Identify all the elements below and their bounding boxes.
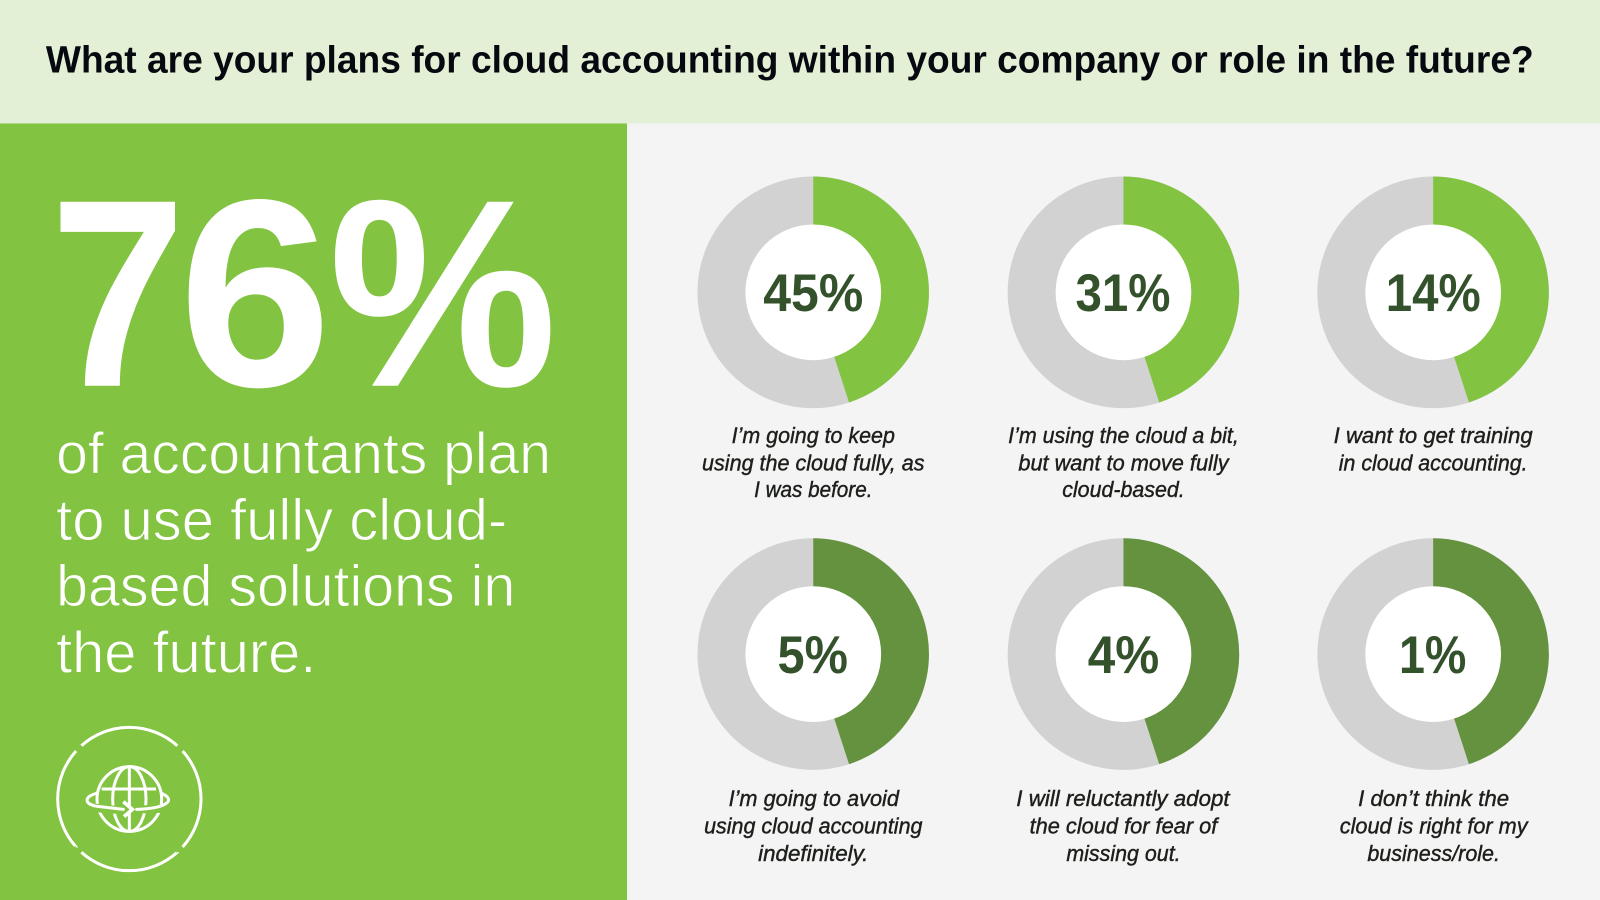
caption: 14%: in cloud accounting. <box>1339 450 1528 475</box>
donut: 4%: 4% <box>1088 626 1159 685</box>
caption: 31% <box>1008 423 1239 502</box>
caption: 5%: I’m going to avoid <box>729 786 900 811</box>
big number 76%: 7 <box>50 144 186 443</box>
caption: 45%: I was before. <box>754 477 872 502</box>
caption: 4%: I will reluctantly adopt <box>1016 786 1231 811</box>
stat description: the future. <box>56 620 316 685</box>
caption: 1%: cloud is right for my <box>1340 814 1530 839</box>
donut: 31%: 31% <box>1076 264 1170 323</box>
donut: 45% <box>697 177 929 408</box>
donut: 14% <box>1317 177 1549 408</box>
donut: 5%: 5% <box>778 626 848 685</box>
caption: 45% <box>702 423 925 502</box>
caption: 5%: using cloud accounting <box>704 814 922 839</box>
caption: 14%: I want to get training <box>1334 423 1533 448</box>
caption: 5%: indefinitely. <box>758 841 868 866</box>
caption: 1% <box>1340 786 1530 866</box>
donut: 1%: 1% <box>1399 626 1466 685</box>
caption: 5% <box>704 786 922 866</box>
stat description <box>56 421 551 685</box>
caption: 14% <box>1334 423 1533 475</box>
donut: 45%: 45% <box>763 264 863 323</box>
caption: 1%: I don’t think the <box>1358 786 1509 811</box>
caption: 4%: the cloud for fear of <box>1030 814 1219 839</box>
panel: 76% headline stat <box>0 123 627 900</box>
stat description: to use fully cloud- <box>56 488 507 553</box>
caption: 31%: cloud-based. <box>1062 477 1185 502</box>
donut: 4% <box>1008 538 1239 770</box>
stat description: based solutions in <box>56 554 515 619</box>
donut: 31% <box>1008 177 1239 408</box>
header band with title <box>0 0 1600 123</box>
caption: 45%: using the cloud fully, as <box>702 450 925 475</box>
big number 76% <box>50 144 557 443</box>
icon: globe in dashed circle <box>28 698 231 900</box>
caption: 31%: I’m using the cloud a bit, <box>1008 423 1239 448</box>
caption: 4% <box>1016 786 1231 866</box>
stat description: of accountants plan <box>56 421 551 486</box>
caption: 31%: but want to move fully <box>1018 450 1231 475</box>
caption: 45%: I’m going to keep <box>732 423 895 448</box>
title: What are your plans for cloud accounting within your company or role in the future? <box>46 38 1534 80</box>
donut: 14%: 14% <box>1386 264 1481 323</box>
big number 76%: % <box>329 144 557 443</box>
donut: 5% <box>697 538 929 770</box>
donut: 1% <box>1317 538 1549 770</box>
caption: 1%: business/role. <box>1367 841 1500 866</box>
big number 76%: 6 <box>179 144 332 443</box>
caption: 4%: missing out. <box>1066 841 1181 866</box>
